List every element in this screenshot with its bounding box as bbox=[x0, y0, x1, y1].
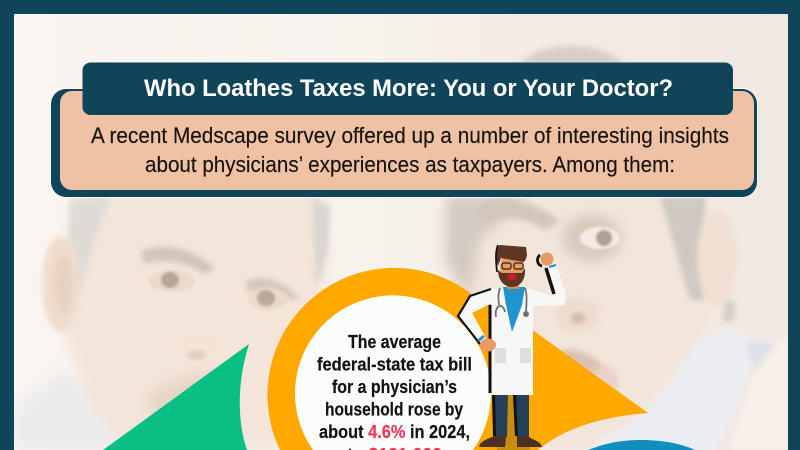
intro text: about physicians’ experiences as taxpayers. Among them: bbox=[145, 152, 675, 177]
right man bbox=[520, 46, 625, 64]
lab coat body bbox=[491, 289, 533, 395]
intro text: A recent Medscape survey offered up a number of interesting insights bbox=[91, 123, 729, 148]
coat outlines bbox=[458, 289, 491, 344]
beard bbox=[498, 268, 525, 287]
green teardrop bbox=[103, 344, 249, 450]
leg shadow bbox=[497, 395, 530, 450]
callout text bbox=[317, 331, 472, 450]
hair bbox=[497, 245, 527, 266]
stethoscope bbox=[498, 288, 527, 312]
shoes bbox=[479, 436, 506, 447]
pockets bbox=[495, 348, 506, 363]
panel shadow shape bbox=[50, 88, 758, 198]
callout text: household rose by bbox=[325, 398, 464, 420]
callout text: The average bbox=[348, 331, 441, 352]
callout text: about 4.6% in 2024, bbox=[319, 421, 470, 442]
orange teardrop ring bbox=[267, 268, 648, 450]
callout text: federal-state tax bill bbox=[317, 354, 472, 374]
blue scrub top bbox=[503, 287, 525, 332]
raised arm bbox=[533, 264, 566, 306]
title: Who Loathes Taxes More: You or Your Doctor? bbox=[144, 75, 673, 102]
hand on hip bbox=[480, 338, 496, 352]
left sleeve bbox=[458, 288, 494, 345]
left man bbox=[14, 374, 116, 449]
panel peach fill bbox=[60, 91, 754, 190]
heading bar bbox=[82, 62, 733, 115]
panel: intro box bbox=[50, 88, 758, 198]
doctor character bbox=[458, 245, 566, 450]
blue circle top bbox=[588, 440, 695, 450]
head bbox=[507, 280, 519, 289]
fist bbox=[540, 252, 554, 266]
glasses bbox=[502, 263, 511, 269]
trousers bbox=[493, 393, 508, 437]
callout text: for a physician’s bbox=[332, 376, 457, 397]
mouth bbox=[507, 274, 517, 280]
white inner circle bbox=[295, 295, 491, 450]
intro text bbox=[91, 123, 729, 177]
